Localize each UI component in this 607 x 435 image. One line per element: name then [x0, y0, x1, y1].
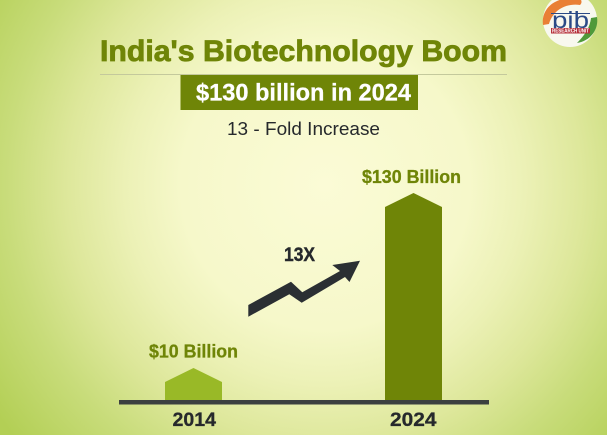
value label: $130 Billion: $130 Billion: [362, 167, 461, 187]
logo: PIB research unit: pib: [552, 7, 589, 33]
growth label: 13X: 13X: [284, 245, 315, 266]
value label: $10 Billion: $10 Billion: [149, 342, 238, 362]
subtitle: 13 - Fold Increase: [227, 118, 380, 139]
banner: $130 billion in 2024: $130 billion in 2024: [196, 80, 412, 106]
bar: 2024: [385, 193, 442, 400]
axis label: 2014: 2014: [172, 410, 216, 431]
logo: PIB research unit: RESEARCH UNIT: [552, 28, 589, 34]
axis label: 2024: 2024: [390, 410, 437, 431]
axis: [119, 400, 489, 404]
bar: 2014: [165, 368, 222, 400]
logo: PIB research unit: [543, 0, 597, 47]
arrow: upward growth: [248, 261, 360, 317]
title: India's Biotechnology Boom: [100, 35, 507, 68]
bar chart: [119, 167, 489, 431]
